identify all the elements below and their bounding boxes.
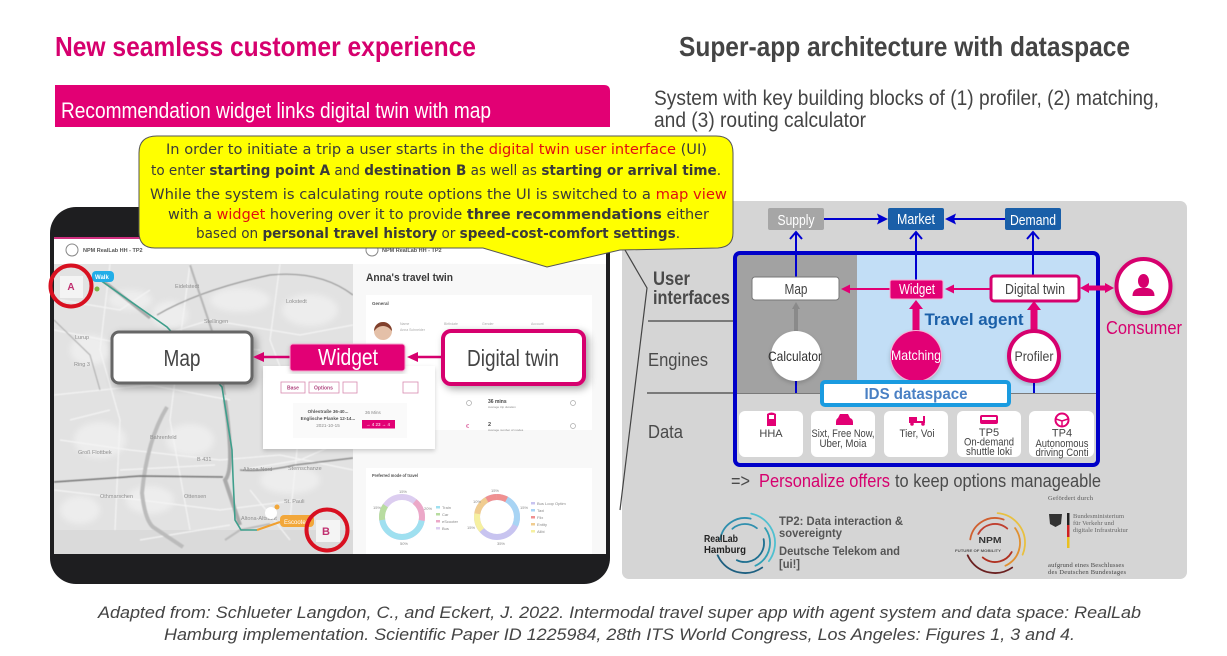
takeaway: personalize offers: => xyxy=(731,470,750,491)
panel: architecture background xyxy=(622,201,1187,579)
callout: Map: Map xyxy=(164,345,200,371)
trip statistics: 2 xyxy=(488,422,491,428)
layer label: user interfaces xyxy=(653,268,730,309)
subtitle: system building blocks: System with key building blocks of (1) profiler, (2) matching, xyxy=(654,87,1159,110)
data source: TP5 on-demand shuttle: TP5 xyxy=(979,427,999,439)
label: Travel agent: Travel agent xyxy=(924,310,1024,329)
donut chart: transport modes xyxy=(382,497,422,537)
map place names: B 431 xyxy=(197,457,211,463)
donut labels and legends: 15% xyxy=(373,505,381,510)
app header: NPM RealLab HH - TP2 xyxy=(382,248,442,254)
logo: federal ministry: Bundesministerium xyxy=(1073,513,1124,520)
donut labels and legends: Bus xyxy=(442,526,449,531)
takeaway: personalize offers: Personalize offers xyxy=(759,470,890,491)
donut labels and legends: 15% xyxy=(520,505,528,510)
trip statistics xyxy=(466,399,576,432)
engine: Calculator xyxy=(768,331,822,381)
callout: yellow explanation bubble: In order to initiate a trip a user starts in the digital twin user interface (UI) xyxy=(166,142,707,158)
route line xyxy=(100,280,257,530)
callout: yellow explanation bubble: to enter starting point A and destination B as well as starting or arrival time. xyxy=(151,163,721,179)
scooter label xyxy=(265,504,314,527)
box: IDS dataspace: IDS dataspace xyxy=(864,386,968,403)
widget card: Ohlestraße 36-40... xyxy=(308,409,348,414)
box: Market xyxy=(888,208,944,230)
trip statistics: Average number of modes xyxy=(488,428,524,432)
widget card: → 4 23 → 4 xyxy=(366,422,391,427)
callout: yellow explanation bubble xyxy=(139,136,733,267)
donut labels and legends: Alibi xyxy=(537,529,545,534)
digital twin panel: General xyxy=(372,301,389,306)
donut labels and legends: Train xyxy=(442,505,451,510)
donut labels and legends: 10% xyxy=(473,499,481,504)
callout: Digital twin: Digital twin xyxy=(467,345,559,371)
digital twin panel: Account xyxy=(531,322,544,326)
subtitle: system building blocks xyxy=(654,87,1159,132)
logo: NPM: FUTURE OF MOBILITY xyxy=(955,549,1002,553)
arrow: digital twin to widget xyxy=(407,352,442,362)
data source: Tier, Voi xyxy=(884,411,948,457)
box: Supply xyxy=(768,208,824,230)
heading: Anna's travel twin: Anna's travel twin xyxy=(366,272,453,284)
arrows: blue flows xyxy=(790,214,1039,393)
donut labels and legends: eScooter xyxy=(442,519,459,524)
scooter label: Escooter xyxy=(284,520,308,526)
data source: TP4 autonomous driving: driving Conti xyxy=(1036,447,1088,459)
gray engine section xyxy=(737,254,857,393)
marker A: A xyxy=(67,282,75,293)
title: Super-app architecture with dataspace: Super-app architecture with dataspace xyxy=(679,31,1130,62)
partner text: [ui!] xyxy=(779,557,800,571)
citation: Adapted from: Schlueter Langdon, C., and Eckert, J. 2022. Intermodal travel super app with agent system and data space: RealLab xyxy=(97,604,1141,622)
data source: Tier, Voi: Tier, Voi xyxy=(900,428,934,440)
callout: yellow explanation bubble: While the system is calculating route options the UI is switched to a map view xyxy=(150,187,727,203)
donut labels and legends: 50% xyxy=(400,541,408,546)
box: Supply: Supply xyxy=(778,213,815,229)
map place names: Ottensen xyxy=(184,494,206,500)
marker B xyxy=(306,510,348,550)
box: IDS dataspace xyxy=(822,382,1009,405)
box: Map: Map xyxy=(784,282,808,298)
system boundary xyxy=(735,253,1098,465)
callout: Map xyxy=(112,332,252,383)
data source: TP4 autonomous driving xyxy=(1029,411,1094,459)
data source: HHA xyxy=(739,411,803,457)
digital twin panel: Anna Schneider xyxy=(400,328,426,332)
trip statistics: € xyxy=(466,424,469,430)
box: Digital twin: Digital twin xyxy=(1005,282,1065,298)
engine: Matching xyxy=(890,330,942,382)
tablet frame xyxy=(50,207,610,584)
layer label: user interfaces: interfaces xyxy=(653,287,730,309)
map place names: Lokstedt xyxy=(286,299,307,305)
callout: Digital twin xyxy=(443,331,584,384)
takeaway: personalize offers: to keep options manageable xyxy=(895,470,1101,491)
map place names: Groß Flottbek xyxy=(78,450,112,456)
logo: federal ministry xyxy=(1048,495,1129,576)
trip statistics: 36 mins xyxy=(488,399,507,405)
callout: yellow explanation bubble: with a widget hovering over it to provide three recommendations either xyxy=(168,207,709,223)
donut labels and legends: Taxi xyxy=(537,508,544,513)
trip statistics: Average trip duration xyxy=(488,405,516,409)
partner text: sovereignty xyxy=(779,526,842,540)
title: New seamless customer experience: New seamless customer experience xyxy=(55,31,476,62)
marker A xyxy=(50,266,92,306)
banner: recommendation widget xyxy=(55,85,610,127)
logo: federal ministry: Gefördert durch xyxy=(1048,495,1094,502)
map place names: Stellingen xyxy=(204,319,228,325)
map place names: Eidelstedt xyxy=(175,284,200,290)
map place names: Othmarschen xyxy=(100,494,133,500)
data source: TP5 on-demand shuttle xyxy=(957,411,1021,458)
layer label: engines: Engines xyxy=(648,349,708,370)
map place names: Altona-Altstadt xyxy=(241,516,277,522)
widget card xyxy=(263,366,435,449)
logo: federal ministry: des Deutschen Bundestages xyxy=(1048,569,1126,576)
partner text xyxy=(779,514,903,571)
logo: RealLab Hamburg: Hamburg xyxy=(704,545,746,556)
walk label: Walk xyxy=(95,275,109,281)
map place names: St. Pauli xyxy=(284,499,304,505)
citation xyxy=(97,604,1141,644)
data source: Sixt, Free Now, Uber, Moia: Uber, Moia xyxy=(820,438,867,450)
map place names: Bahrenfeld xyxy=(150,435,177,441)
icon: consumer xyxy=(1116,259,1170,313)
banner: recommendation widget: Recommendation widget links digital twin with map xyxy=(61,98,491,123)
callout: yellow explanation bubble: based on personal travel history or speed-cost-comfort settings. xyxy=(196,226,680,242)
digital twin panel xyxy=(353,264,606,554)
map place names xyxy=(74,284,322,522)
data source: TP4 autonomous driving: TP4 xyxy=(1052,428,1072,440)
donut labels and legends: Entity xyxy=(537,522,547,527)
box: Widget: Widget xyxy=(899,282,935,298)
donut labels and legends: 15% xyxy=(467,525,475,530)
travel agent section xyxy=(857,254,1097,393)
heading: preferred mode of travel: Preferred mode of travel xyxy=(372,473,418,479)
digital twin panel: Birthdate xyxy=(444,322,458,326)
box: Market: Market xyxy=(897,212,935,228)
engine: Matching: Matching xyxy=(891,347,941,363)
callout connector lines xyxy=(620,250,647,510)
donut labels and legends: Car xyxy=(442,512,449,517)
app header: NPM RealLab HH - TP2 xyxy=(83,248,143,254)
panel: tablet with app screen xyxy=(50,207,610,584)
digital twin panel: Name xyxy=(400,322,409,326)
marker B: B xyxy=(322,526,330,538)
box: Demand xyxy=(1005,208,1061,230)
engine: Profiler: Profiler xyxy=(1014,348,1054,364)
profile photo xyxy=(374,322,392,340)
walk label xyxy=(92,271,114,282)
label: Consumer: Consumer xyxy=(1106,318,1182,338)
widget card: Options xyxy=(314,386,333,392)
map place names: Sternschanze xyxy=(288,466,322,472)
engine: Profiler xyxy=(1009,331,1059,381)
data source: TP5 on-demand shuttle: shuttle loki xyxy=(966,446,1012,458)
data source: Sixt, Free Now, Uber, Moia xyxy=(811,411,875,457)
subtitle: system building blocks: and (3) routing calculator xyxy=(654,109,866,132)
map place names: Altona-Nord xyxy=(243,467,272,473)
callout: Widget xyxy=(290,344,405,371)
data source: HHA: HHA xyxy=(759,428,783,440)
arrow: widget to map xyxy=(253,352,290,362)
donut labels and legends: 15% xyxy=(491,488,499,493)
arrow: calculator to map xyxy=(792,302,800,331)
box: Map xyxy=(752,277,839,300)
donut labels and legends: Flix xyxy=(537,515,543,520)
app screen xyxy=(54,237,606,554)
callout: Widget: Widget xyxy=(318,344,379,370)
citation: Hamburg implementation. Scientific Paper ID 1225984, 28th ITS World Congress, Los Angeles: Figures 1, 3 and 4. xyxy=(164,626,1075,644)
box: Widget xyxy=(890,280,943,299)
logo: federal ministry: für Verkehr und xyxy=(1073,520,1115,527)
donut labels and legends: 35% xyxy=(497,541,505,546)
widget card: 36 Mins xyxy=(365,410,382,415)
logo: federal ministry: aufgrund eines Beschlusses xyxy=(1048,562,1124,569)
layer label: user interfaces: User xyxy=(653,268,690,290)
layer label: data: Data xyxy=(648,421,684,442)
box: Demand: Demand xyxy=(1010,213,1056,229)
widget card: Englische Planke 12-14... xyxy=(301,416,355,421)
takeaway: personalize offers xyxy=(731,470,1101,491)
data source: TP5 on-demand shuttle: On-demand xyxy=(964,436,1014,448)
data source: TP4 autonomous driving: Autonomous xyxy=(1036,438,1089,450)
logo: NPM: NPM xyxy=(978,535,1002,545)
logo: NPM xyxy=(953,501,1037,585)
donut chart: providers xyxy=(477,497,517,537)
logo: RealLab Hamburg xyxy=(703,501,787,585)
digital twin panel: Gender xyxy=(482,322,495,326)
logo: federal ministry: digitale Infrastruktur xyxy=(1073,527,1129,534)
widget card: Base xyxy=(287,386,299,392)
arrows: magenta flows xyxy=(841,283,1114,331)
donut labels and legends xyxy=(373,488,566,546)
engine: Calculator: Calculator xyxy=(768,348,822,364)
donut labels and legends: 15% xyxy=(399,489,407,494)
map place names: Ring 3 xyxy=(74,362,90,368)
logo: RealLab Hamburg: RealLab xyxy=(704,533,738,545)
map place names: Lurup xyxy=(75,335,89,341)
data source: Sixt, Free Now, Uber, Moia: Sixt, Free Now, xyxy=(812,428,874,440)
map view xyxy=(54,264,353,554)
widget card: 2021-10-15 xyxy=(316,423,340,428)
panel: architecture diagram xyxy=(647,208,1182,585)
partner text: TP2: Data interaction & xyxy=(779,514,903,528)
box: Digital twin xyxy=(991,276,1079,301)
layer dividers xyxy=(647,321,1097,393)
app header xyxy=(66,244,442,256)
donut labels and legends: Bus Loop Optim xyxy=(537,501,566,506)
partner text: Deutsche Telekom and xyxy=(779,544,900,558)
donut labels and legends: 20% xyxy=(424,506,432,511)
